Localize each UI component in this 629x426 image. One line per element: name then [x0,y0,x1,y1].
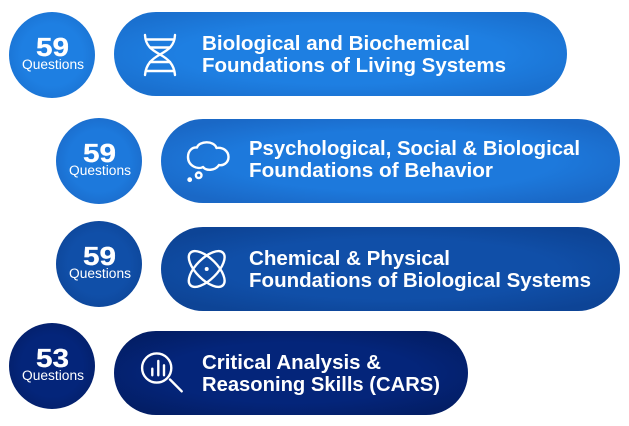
label: Critical Analysis & [202,352,381,374]
row 4: critical analysis and reasoning skills [9,323,468,415]
label [202,33,506,77]
label: Psychological, Social & Biological [249,138,580,160]
label: Chemical & Physical [249,248,450,270]
label: Foundations of Living Systems [202,55,506,77]
label: Foundations of Biological Systems [249,270,591,292]
badge: 53 questions: Questions [22,368,84,383]
row 3: chemical and physical foundations [56,221,620,311]
icon: thought cloud [188,142,228,181]
icon: dna helix [145,35,175,75]
badge: 59 questions: 59 [83,241,116,271]
row 2: psychological, social and biological foundations [56,118,620,204]
icon: magnifying glass with bar chart [142,353,182,391]
pill: biological and biochemical [114,12,567,96]
badge: 59 questions [9,12,95,98]
pill: cars [114,331,468,415]
pill: psychological [161,119,620,203]
label [249,138,580,182]
label [202,352,440,396]
badge: 59 questions: Questions [22,57,84,72]
label: Foundations of Behavior [249,160,493,182]
badge: 53 questions: 53 [36,343,69,373]
badge: 53 questions [9,323,95,409]
badge: 59 questions [56,221,142,307]
badge: 59 questions: 59 [83,138,116,168]
row 1: biological and biochemical foundations [9,12,567,98]
badge: 59 questions [56,118,142,204]
label: Biological and Biochemical [202,33,470,55]
pill: chemical and physical [161,227,620,311]
label [249,248,591,292]
badge: 59 questions: Questions [69,266,131,281]
badge: 59 questions: Questions [69,163,131,178]
icon: atom [183,245,230,293]
label: Reasoning Skills (CARS) [202,374,440,396]
badge: 59 questions: 59 [36,32,69,62]
